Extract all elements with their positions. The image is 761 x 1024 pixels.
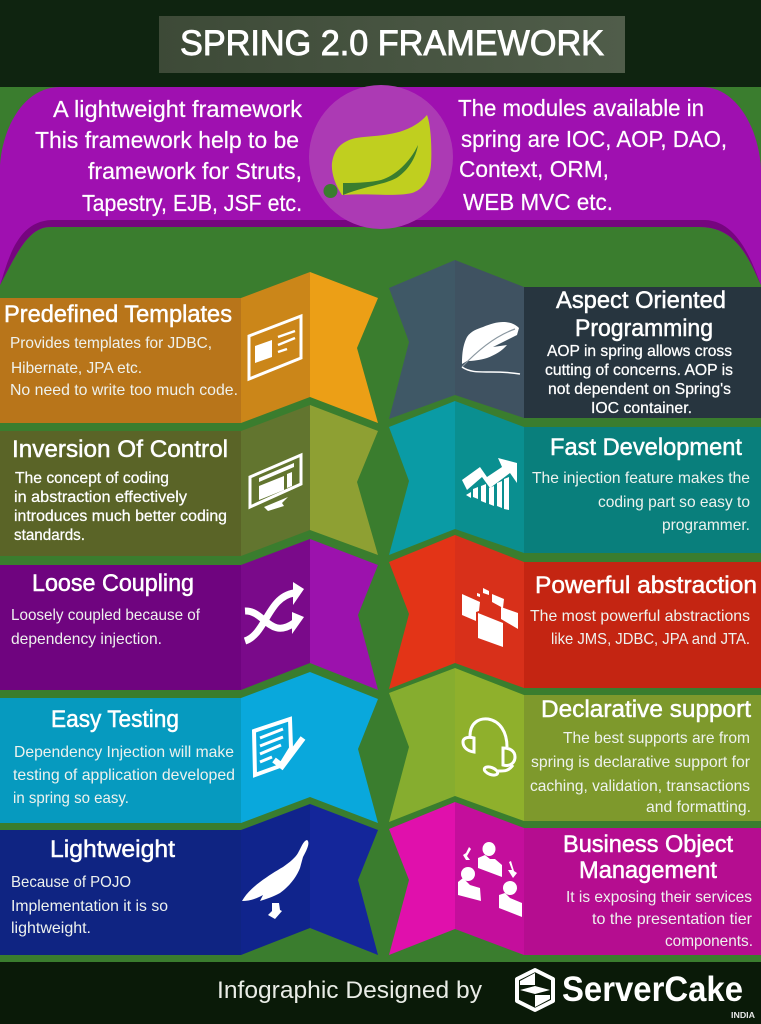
logo wordmark: ServerCake: [562, 970, 743, 1009]
text: Fast Development: programmer.: [662, 517, 750, 534]
panel: Fast Development: [389, 401, 761, 555]
text: Inversion Of Control: in abstraction effectively: [14, 489, 187, 506]
text: Inversion Of Control: [12, 436, 228, 544]
text: Declarative support: The best supports are from: [563, 730, 750, 747]
intro text left: A lightweight framework: [53, 96, 303, 122]
text: Fast Development: The injection feature makes the: [532, 470, 750, 487]
intro text right: Context, ORM,: [459, 156, 609, 182]
text: Predefined Templates: [4, 301, 238, 399]
text: Fast Development: coding part so easy to: [598, 494, 750, 511]
text: Aspect Oriented Programming: not dependent on Spring's: [548, 381, 731, 398]
logo circle with leaf: [309, 85, 453, 229]
panel: Powerful abstraction: [389, 535, 761, 689]
panel: Inversion Of Control: [0, 405, 378, 556]
top dark header band: [0, 0, 761, 87]
panel: purple intro banner: [0, 85, 761, 285]
text: Predefined Templates: Predefined Templates: [4, 301, 232, 328]
text: Predefined Templates: Provides templates for JDBC,: [10, 335, 212, 352]
icon: shuffle arrows: [245, 582, 304, 641]
icon: team of people: [458, 842, 522, 917]
text: Business Object Management: to the presentation tier: [592, 911, 753, 928]
text: Fast Development: Fast Development: [550, 434, 742, 461]
intro text right: WEB MVC etc.: [463, 189, 613, 215]
icon: checklist document: [254, 719, 303, 775]
icon: white feather with down arrow: [242, 840, 308, 919]
text: Declarative support: Declarative support: [541, 696, 751, 723]
text: Loose Coupling: Loosely coupled because of: [11, 607, 201, 624]
icon: template window: [249, 316, 301, 379]
text: Powerful abstraction: Powerful abstraction: [535, 572, 757, 599]
text: Loose Coupling: [11, 570, 201, 648]
text: Lightweight: [11, 836, 175, 937]
panel: Aspect Oriented Programming: [389, 260, 761, 419]
text: Aspect Oriented Programming: IOC container.: [591, 400, 692, 417]
panel: Easy Testing: [0, 672, 378, 823]
text: Declarative support: [530, 696, 751, 816]
text: Predefined Templates: Hibernate, JPA etc.: [11, 360, 142, 377]
icon: quill: [462, 322, 520, 374]
text: Lightweight: lightweight.: [11, 920, 91, 937]
footer credit text: Infographic Designed by: [217, 977, 482, 1004]
intro text right: The modules available in: [458, 95, 704, 121]
text: Lightweight: Because of POJO: [11, 874, 131, 891]
icon: headset: [463, 719, 515, 777]
text: Inversion Of Control: standards.: [14, 527, 85, 544]
logo India tag: INDIA: [731, 1011, 755, 1020]
logo: ServerCake hexagon: [517, 970, 553, 1010]
title: [159, 16, 625, 73]
text: Easy Testing: in spring so easy.: [13, 790, 129, 807]
text: Aspect Oriented Programming: [545, 287, 733, 417]
text: Powerful abstraction: [530, 572, 757, 648]
text: Powerful abstraction: like JMS, JDBC, JPA and JTA.: [551, 631, 750, 648]
intro text left: Tapestry, EJB, JSF etc.: [82, 190, 302, 216]
panel: Loose Coupling: [0, 539, 378, 690]
icon: rising chart arrow: [462, 458, 517, 510]
text: Aspect Oriented Programming: AOP in spring allows cross: [547, 343, 732, 360]
text: Loose Coupling: dependency injection.: [11, 631, 162, 648]
panel: Declarative support: [389, 668, 761, 822]
intro text right: [458, 95, 727, 215]
footer band: [0, 962, 761, 1024]
icon: scattered blocks: [462, 588, 518, 647]
text: Lightweight: Implementation it is so: [11, 898, 168, 915]
panel: Lightweight: [0, 804, 378, 955]
text: Business Object Management: Business Object: [563, 831, 733, 858]
text: Lightweight: Lightweight: [50, 836, 175, 863]
text: Aspect Oriented Programming: Programming: [575, 315, 713, 342]
panel: Predefined Templates: [0, 272, 378, 423]
text: Easy Testing: Dependency Injection will make: [14, 744, 234, 761]
text: Aspect Oriented Programming: Aspect Oriented: [556, 287, 726, 314]
text: Easy Testing: testing of application developed: [13, 767, 235, 784]
text: Powerful abstraction: The most powerful abstractions: [530, 608, 750, 625]
intro text left: This framework help to be: [35, 127, 299, 153]
text: Easy Testing: Easy Testing: [51, 706, 179, 733]
title: SPRING 2.0 FRAMEWORK: [180, 24, 604, 63]
text: Business Object Management: components.: [665, 933, 753, 950]
intro text right: spring are IOC, AOP, DAO,: [461, 126, 727, 152]
panel: Business Object Management: [389, 802, 761, 955]
text: Inversion Of Control: introduces much better coding: [14, 508, 227, 525]
text: Easy Testing: [13, 706, 235, 807]
text: Declarative support: caching, validation, transactions: [530, 778, 750, 795]
text: Business Object Management: Management: [579, 857, 717, 884]
text: Predefined Templates: No need to write too much code.: [10, 382, 238, 399]
text: Loose Coupling: Loose Coupling: [32, 570, 194, 597]
icon: monitor: [250, 455, 301, 511]
text: Business Object Management: [563, 831, 753, 950]
text: Inversion Of Control: The concept of coding: [15, 470, 169, 487]
text: Aspect Oriented Programming: cutting of concerns. AOP is: [545, 362, 733, 379]
text: Declarative support: and formatting.: [646, 799, 751, 816]
text: Declarative support: spring is declarative support for: [531, 754, 751, 771]
text: Business Object Management: It is exposing their services: [566, 889, 752, 906]
text: Inversion Of Control: Inversion Of Control: [12, 436, 228, 463]
intro text left: framework for Struts,: [88, 158, 302, 184]
text: Fast Development: [532, 434, 750, 534]
intro text left: [35, 96, 303, 216]
